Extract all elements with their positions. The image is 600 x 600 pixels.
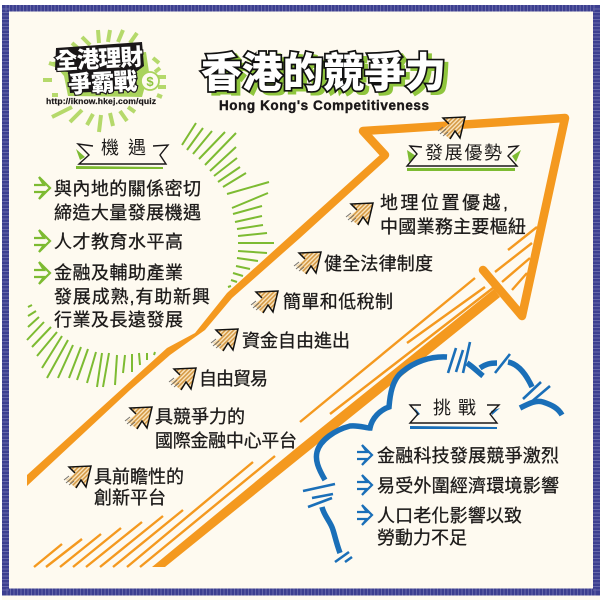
logo sun rays (43, 30, 166, 132)
arrow head outline (363, 118, 565, 316)
title (201, 50, 450, 113)
item: 創新平台: 創新平台 (94, 488, 166, 508)
item: 自由貿易: 自由貿易 (199, 369, 268, 389)
item: 國際金融中心 (125, 407, 297, 451)
banner: 挑戰: 挑 戰 (433, 398, 476, 418)
banner: 機遇: 機 遇 (101, 138, 146, 158)
arrow speed stripes (34, 227, 537, 567)
item: 國際金融中心: 國際金融中心平台 (155, 431, 297, 451)
banner: 發展優勢: 發展優勢 (425, 143, 502, 163)
panel: challenges (357, 398, 559, 548)
icon: dollar light bulb: $ (146, 74, 154, 89)
bullet 1: 締造大量發展機遇 (54, 203, 201, 223)
bullet 2: 人才教育水平高 (54, 232, 183, 252)
big growth arrow (27, 118, 565, 567)
item: 資金自由: 資金自由進出 (242, 331, 350, 351)
panel: development strengths (64, 117, 526, 508)
bullet 3: 行業及長遠發展 (54, 310, 183, 330)
logo url: http://iknow.hkej.com/quiz (46, 96, 156, 106)
item: 創新平台: 具前瞻性的 (94, 467, 184, 487)
logo black backing (55, 42, 144, 93)
cloud outline (316, 357, 562, 553)
challenge 2: 易受外圍經濟環境影響 (377, 476, 559, 496)
title main: 香港的競爭力 (201, 50, 446, 96)
bullet 3: 發展成熟,有助新興 (54, 287, 210, 307)
arrow lower edge (152, 289, 500, 567)
cloud (303, 342, 562, 562)
item: 地理位置: 中國業務主要樞紐 (380, 217, 526, 237)
title english: Hong Kong's Competitiveness (219, 98, 429, 113)
banner: 挑戰 (410, 398, 500, 429)
item: 地理位置: 地理位置優越, (380, 193, 508, 213)
panel: opportunities (34, 138, 210, 330)
item: 低稅制: 簡單和低稅制 (283, 292, 393, 312)
item: 國際金融中心: 具競爭力的 (155, 407, 245, 427)
item arrow top (438, 117, 465, 139)
challenge 3: 人口老化影響以致 (377, 506, 522, 526)
banner: 機遇 (76, 138, 168, 169)
challenge 3 (357, 505, 522, 548)
logo green shadow (52, 52, 149, 97)
bullet 3: 金融及輔助產業 (54, 263, 183, 283)
item: 法律制度: 健全法律制度 (324, 254, 433, 274)
title main: 香港的競爭力 (205, 53, 450, 99)
bullet 1: 與內地的關係密切 (54, 178, 201, 199)
banner: 發展優勢 (407, 143, 521, 171)
challenge 3: 勞動力不足 (377, 528, 467, 548)
quiz logo (43, 30, 166, 132)
logo heading: 全港理財 (55, 44, 144, 74)
item: 地理位置 (346, 193, 526, 237)
logo subheading: 爭霸戰 (68, 68, 138, 98)
sun rays (27, 123, 274, 387)
bullet 1 (34, 177, 201, 223)
challenge 1: 金融科技發展競爭激烈 (377, 446, 559, 466)
item: 自由貿易 (169, 368, 268, 390)
item: 創新平台 (64, 466, 184, 508)
bullet 3 (34, 262, 210, 330)
cloud hatches (303, 342, 550, 562)
arrow upper edge (27, 154, 388, 486)
